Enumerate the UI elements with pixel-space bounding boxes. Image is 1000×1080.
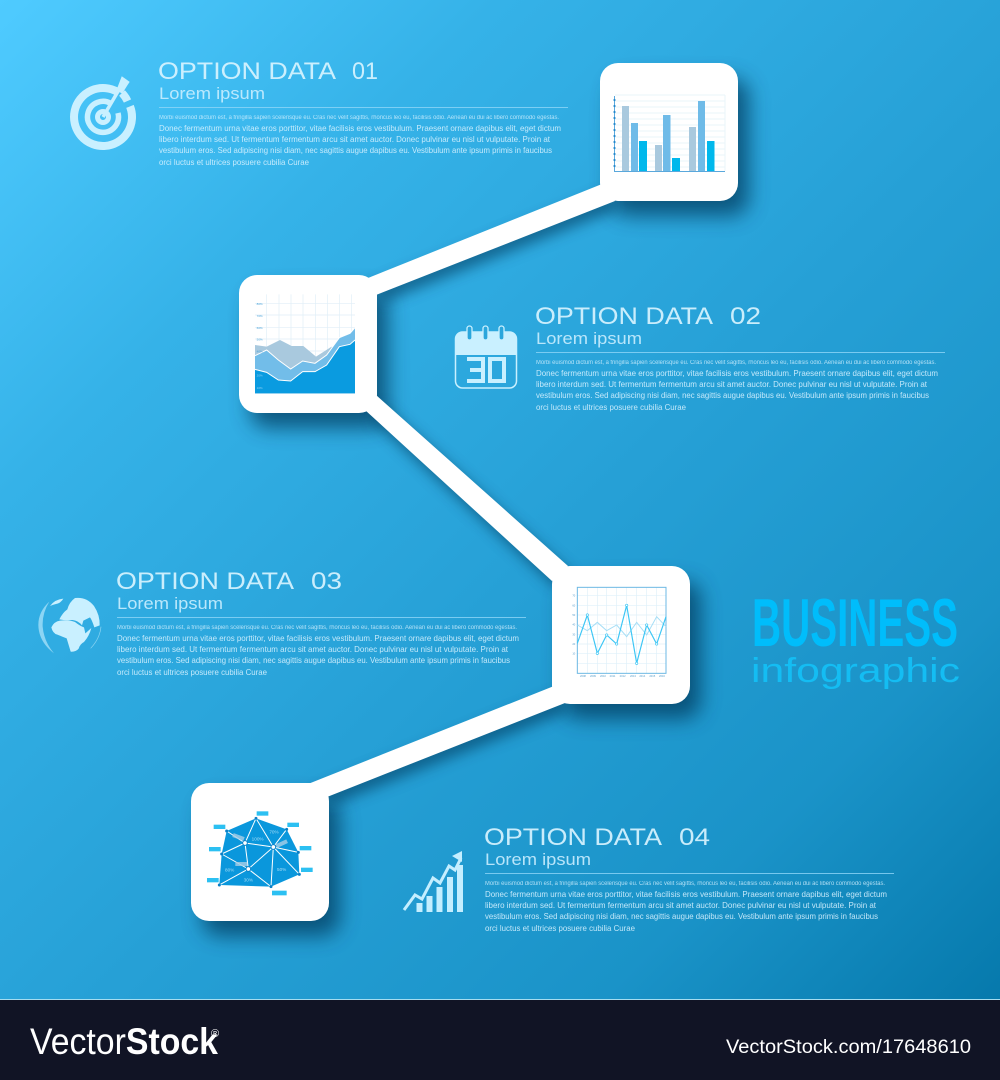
card 2: area chart: 60%	[257, 326, 263, 330]
text block: option data 03: 03	[311, 568, 342, 595]
connector shadows	[315, 193, 618, 804]
text block: option data 01: orci luctus et ultrices posuere cubilia Curae	[159, 157, 309, 167]
text block: option data 01: 01	[352, 58, 378, 85]
text block: option data 03: orci luctus et ultrices posuere cubilia Curae	[117, 667, 267, 677]
heading: business infographic	[751, 585, 960, 690]
footer image id: VectorStock.com/17648610	[726, 1037, 971, 1058]
text block: option data 03: Morbi euismod dictum est, a fringilla sapien scelerisque eu. Cras nec velit sagittis, rhoncus leo eu, facilisis odio. Aenean eu dui ac libero commodo egestas.	[117, 625, 517, 631]
card 4: polygon mesh chart: 30%	[244, 878, 253, 883]
card 3: line chart: 2008	[580, 674, 586, 678]
text block: option data 04	[484, 824, 894, 933]
icon: globe	[38, 598, 101, 653]
text block: option data 03	[116, 568, 526, 677]
card 3: line chart: 2016	[659, 674, 665, 678]
card shadows	[202, 78, 749, 936]
text block: option data 04: orci luctus et ultrices posuere cubilia Curae	[485, 923, 635, 933]
text block: option data 03: OPTION DATA	[116, 568, 294, 595]
card 3: line chart: 2014	[639, 674, 646, 678]
card 1: bar chart	[600, 63, 738, 201]
text block: option data 04: Morbi euismod dictum est, a fringilla sapien scelerisque eu. Cras nec velit sagittis, rhoncus leo eu, facilisis odio. Aenean eu dui ac libero commodo egestas.	[485, 881, 885, 887]
card 3: line chart: 40	[572, 623, 576, 627]
footer logo: VectorStock	[30, 1021, 218, 1062]
text block: option data 02: libero interdum sed. Ut fermentum fermentum arcu sit amet auctor. Donec pulvinar eu nisl ut vulputate. Proin at	[536, 379, 928, 389]
card 2: area chart: 80%	[257, 302, 263, 306]
connector lines	[308, 184, 615, 797]
card 2: area chart: 10%	[257, 386, 263, 390]
text block: option data 01: Donec fermentum urna vitae eros porttitor, vitae facilisis eros vestibulum. Praesent ornare dapibus elit, eget dictum	[159, 123, 561, 133]
text block: option data 02: OPTION DATA	[535, 303, 713, 330]
text block: option data 04: OPTION DATA	[484, 824, 662, 851]
card 3: line chart: 70	[572, 594, 576, 598]
card 3: line chart: 20	[572, 642, 576, 646]
card 3: line chart: 60	[572, 603, 576, 607]
card 4: polygon mesh chart: 70%	[269, 829, 279, 834]
text block: option data 04: vestibulum eros. Sed adipiscing nisi diam, nec sagittis augue dapibus eu. Vestibulum ante ipsum primis in faucibus	[485, 911, 878, 921]
card 4: polygon mesh chart: 100%	[252, 836, 264, 841]
text block: option data 02: 02	[730, 303, 761, 330]
card 2: area chart: 70%	[257, 314, 263, 318]
card 4: polygon mesh chart: 80%	[225, 868, 234, 873]
text block: option data 02	[535, 303, 945, 412]
text block: option data 04: 04	[679, 824, 710, 851]
card 2: area chart	[239, 275, 377, 413]
card 3: line chart: 2013	[630, 674, 636, 678]
text block: option data 02: Morbi euismod dictum est, a fringilla sapien scelerisque eu. Cras nec velit sagittis, rhoncus leo eu, facilisis odio. Aenean eu dui ac libero commodo egestas.	[536, 360, 936, 366]
card 3: line chart: 2009	[590, 674, 596, 678]
text block: option data 04: libero interdum sed. Ut fermentum fermentum arcu sit amet auctor. Donec pulvinar eu nisl ut vulputate. Proin at	[485, 900, 877, 910]
text block: option data 01: vestibulum eros. Sed adipiscing nisi diam, nec sagittis augue dapibus eu. Vestibulum ante ipsum primis in faucibus	[159, 145, 552, 155]
card 4: polygon mesh chart: 50%	[277, 867, 286, 872]
card 3: line chart	[552, 566, 690, 704]
text block: option data 03: Donec fermentum urna vitae eros porttitor, vitae facilisis eros vestibulum. Praesent ornare dapibus elit, eget dictum	[117, 633, 519, 643]
card 3: line chart: 2011	[610, 674, 616, 678]
text block: option data 01	[158, 58, 568, 167]
text block: option data 03: vestibulum eros. Sed adipiscing nisi diam, nec sagittis augue dapibus eu. Vestibulum ante ipsum primis in faucibus	[117, 655, 510, 665]
card 3: line chart: 50	[572, 613, 576, 617]
card 3: line chart: 2015	[649, 674, 656, 678]
text block: option data 01: Lorem ipsum	[159, 84, 265, 103]
text block: option data 02: vestibulum eros. Sed adipiscing nisi diam, nec sagittis augue dapibus eu. Vestibulum ante ipsum primis in faucibus	[536, 390, 929, 400]
card 2: area chart: 20%	[257, 374, 263, 378]
text block: option data 03: libero interdum sed. Ut fermentum fermentum arcu sit amet auctor. Donec pulvinar eu nisl ut vulputate. Proin at	[117, 644, 509, 654]
card 3: line chart: 2010	[600, 674, 606, 678]
icon: growth chart with arrow	[404, 851, 463, 912]
footer band	[0, 999, 1000, 1080]
text block: option data 02: Lorem ipsum	[536, 329, 642, 348]
card 4: polygon mesh chart	[191, 783, 329, 921]
text block: option data 04: Donec fermentum urna vitae eros porttitor, vitae facilisis eros vestibulum. Praesent ornare dapibus elit, eget dictum	[485, 889, 887, 899]
text block: option data 04: Lorem ipsum	[485, 850, 591, 869]
text block: option data 01: Morbi euismod dictum est, a fringilla sapien scelerisque eu. Cras nec velit sagittis, rhoncus leo eu, facilisis odio. Aenean eu dui ac libero commodo egestas.	[159, 115, 559, 121]
card 2: area chart: 50%	[257, 338, 263, 342]
card 3: line chart: 30	[572, 632, 576, 636]
icon: calendar 30	[455, 326, 517, 388]
text block: option data 02: Donec fermentum urna vitae eros porttitor, vitae facilisis eros vestibulum. Praesent ornare dapibus elit, eget dictum	[536, 368, 938, 378]
text block: option data 02: orci luctus et ultrices posuere cubilia Curae	[536, 402, 686, 412]
card 3: line chart: 10	[572, 652, 576, 656]
footer registered mark: ®	[211, 1028, 219, 1040]
text block: option data 01: libero interdum sed. Ut fermentum fermentum arcu sit amet auctor. Donec pulvinar eu nisl ut vulputate. Proin at	[159, 134, 551, 144]
text block: option data 01: OPTION DATA	[158, 58, 336, 85]
heading: business infographic: infographic	[751, 652, 960, 690]
card 3: line chart: 2012	[620, 674, 626, 678]
card 2: area chart: 40%	[257, 349, 263, 353]
text block: option data 03: Lorem ipsum	[117, 594, 223, 613]
icon: target with arrow	[74, 77, 132, 146]
